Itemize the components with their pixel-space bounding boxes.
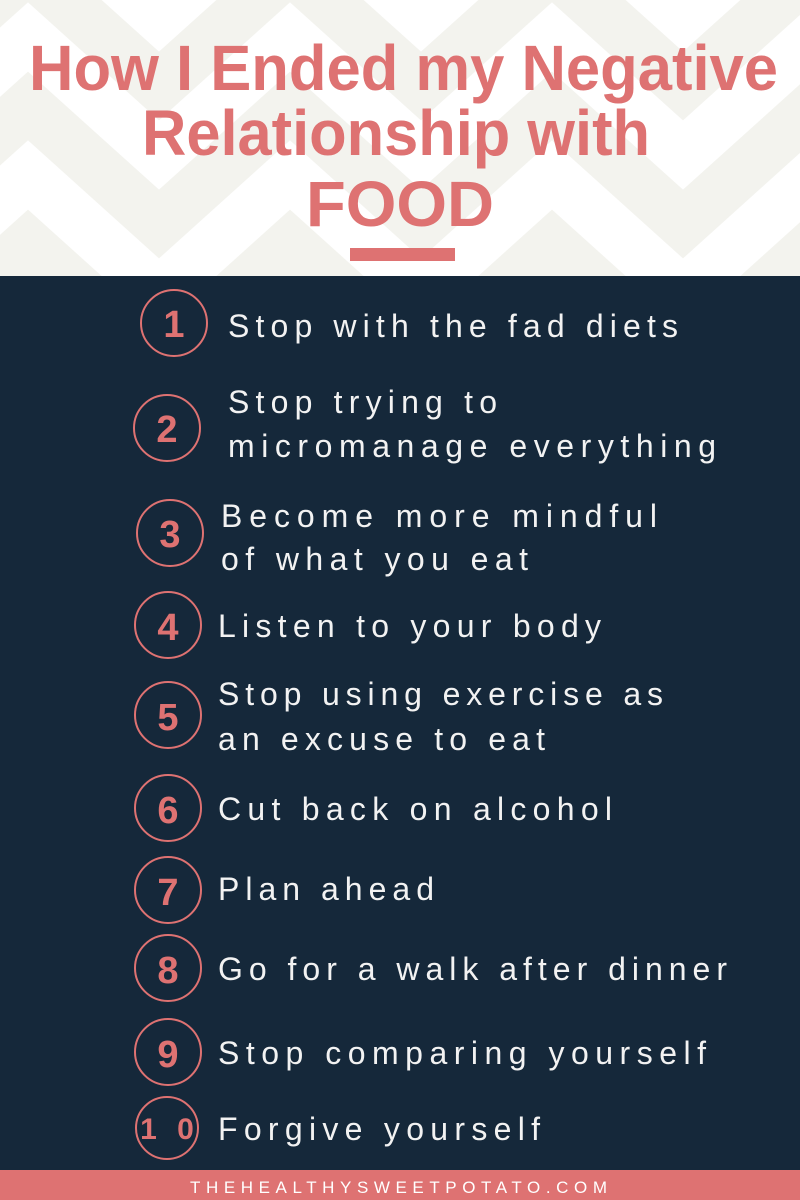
step 3 xyxy=(137,498,657,577)
title underline xyxy=(350,248,455,261)
step 1: 1 xyxy=(163,304,185,346)
step 2 xyxy=(134,384,716,464)
step 5: 5 xyxy=(157,697,179,739)
step 9: 9 xyxy=(157,1034,179,1076)
step 6: Cut back on alcohol xyxy=(218,791,612,827)
title: Relationship with xyxy=(142,97,650,169)
title xyxy=(29,32,778,240)
step 9: Stop comparing yourself xyxy=(218,1035,706,1071)
step 7: Plan ahead xyxy=(218,871,434,907)
step 7 xyxy=(135,857,434,923)
list of steps xyxy=(134,290,727,1159)
step 5: an excuse to eat xyxy=(218,721,545,757)
title: FOOD xyxy=(306,168,494,240)
step 4: 4 xyxy=(157,607,179,649)
step 2: Stop trying to xyxy=(228,384,497,420)
step 9 xyxy=(135,1019,706,1085)
step 8: 8 xyxy=(157,950,179,992)
step 2: 2 xyxy=(156,409,178,451)
step 5: Stop using exercise as xyxy=(218,676,663,712)
step 3: 3 xyxy=(159,514,181,556)
step 6: 6 xyxy=(157,790,179,832)
step 2: micromanage everything xyxy=(228,428,716,464)
footer bar: THEHEALTHYSWEETPOTATO.COM xyxy=(190,1178,607,1197)
step 10: Forgive yourself xyxy=(218,1111,540,1147)
step 10: 1 0 xyxy=(140,1113,200,1146)
step 8: Go for a walk after dinner xyxy=(218,951,727,987)
step 4 xyxy=(135,592,601,658)
step 6 xyxy=(135,775,612,841)
step 8 xyxy=(135,935,727,1001)
step 7: 7 xyxy=(157,872,179,914)
step 1: Stop with the fad diets xyxy=(228,308,678,344)
title: How I Ended my Negative xyxy=(29,32,778,104)
step 3: Become more mindful xyxy=(221,498,657,534)
step 4: Listen to your body xyxy=(218,608,601,644)
main panel xyxy=(0,276,800,1170)
header background xyxy=(0,0,800,276)
footer bar xyxy=(0,1170,800,1200)
step 10 xyxy=(136,1097,540,1159)
step 3: of what you eat xyxy=(221,541,528,577)
step 1 xyxy=(141,290,678,356)
step 5 xyxy=(135,676,663,757)
